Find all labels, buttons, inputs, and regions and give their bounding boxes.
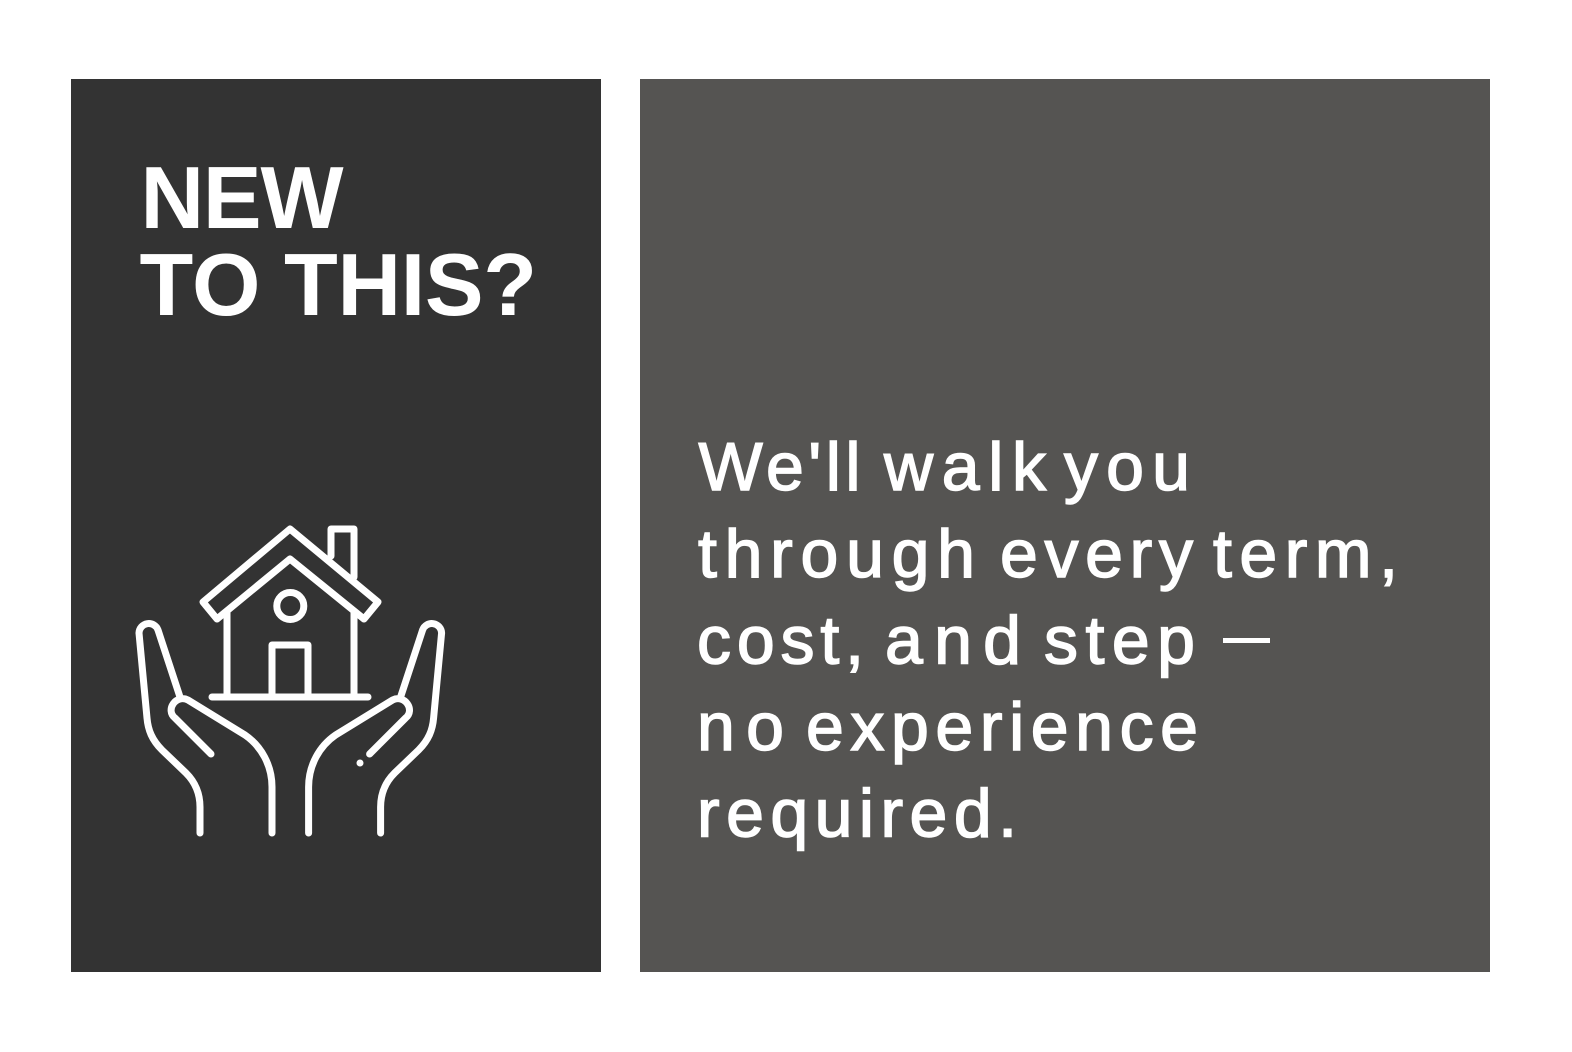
body text: step [1044, 602, 1195, 678]
body text: required. [697, 776, 1017, 852]
heading: new to this [140, 148, 537, 334]
body text: — [1224, 611, 1269, 662]
body text: cost, [697, 602, 864, 678]
heading: new to this: NEW [140, 148, 344, 247]
icon: hands holding a house [139, 529, 442, 833]
icon part: left hand [139, 624, 272, 833]
body text: experience [806, 689, 1198, 765]
icon part: door [272, 645, 308, 697]
body text: through [698, 516, 975, 592]
icon part: round window [277, 592, 304, 620]
icon part: chimney [331, 529, 354, 577]
body text: We'll [698, 429, 860, 505]
heading: new to this: TO [140, 235, 260, 334]
icon part: right hand [309, 624, 442, 833]
body text: and [885, 602, 1021, 678]
icon part: house walls and base [212, 613, 368, 697]
body text: every [1000, 516, 1193, 592]
body text: you [1064, 429, 1190, 505]
body text [697, 429, 1398, 852]
panel: left dark panel [71, 79, 601, 972]
heading: new to this: THIS? [284, 235, 537, 334]
icon part: roof [203, 529, 378, 619]
panel: right grey panel [640, 79, 1490, 972]
body text: no [697, 689, 784, 765]
body text: walk [883, 429, 1047, 505]
body text: term, [1213, 516, 1398, 592]
